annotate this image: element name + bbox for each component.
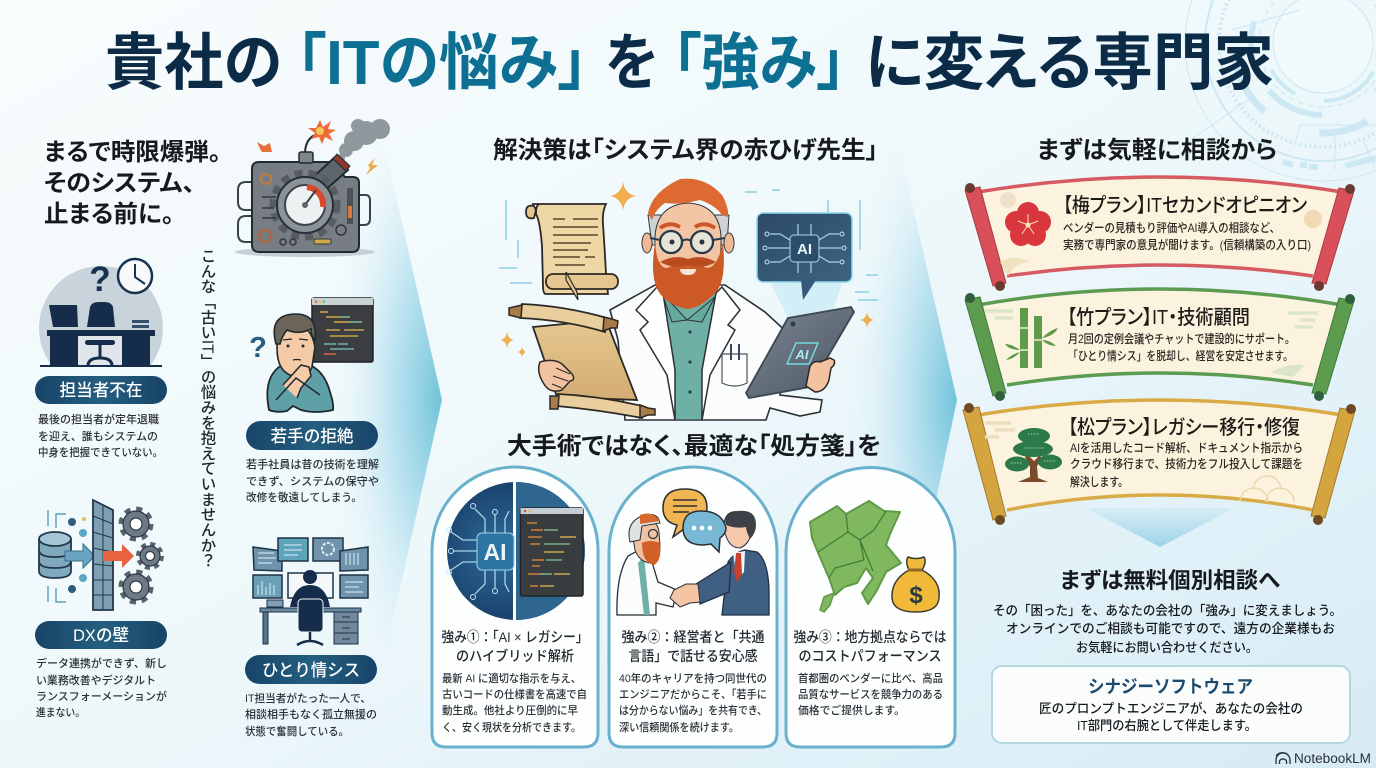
panel: plans and contact bbox=[963, 137, 1371, 766]
plan text: AIを活用したコード解析、ドキュメント指示から bbox=[1070, 440, 1303, 455]
NotebookLM mark: NotebookLM bbox=[1294, 751, 1371, 766]
label pill: DXの壁 bbox=[73, 626, 129, 645]
card text: 古いコードの仕様書を高速で自 bbox=[442, 687, 587, 701]
contact message: その「困った」を、あなたの会社の「強み」に変えましょう。 bbox=[993, 603, 1342, 618]
description: 進まない。 bbox=[36, 706, 85, 719]
card text: 価格でご提供します。 bbox=[798, 703, 905, 717]
title: 「ITの悩み」 bbox=[296, 29, 588, 98]
icon: empty desk bbox=[39, 259, 163, 367]
contact message: オンラインでのご相談も可能ですので、遠方の企業様もお bbox=[1006, 621, 1335, 636]
label pill bbox=[246, 421, 378, 450]
plan text: 【梅プラン】ITセカンドオピニオン bbox=[1063, 194, 1307, 217]
description: データ連携ができず、新し bbox=[36, 656, 167, 670]
plan text: 【松プラン】レガシー移行・修復 bbox=[1068, 416, 1300, 439]
old scroll upper bbox=[526, 204, 618, 300]
label pill bbox=[245, 655, 377, 684]
icon: empty desk: ? bbox=[89, 260, 111, 299]
description: 状態で奮闘している。 bbox=[245, 724, 349, 738]
panel: solution bbox=[432, 137, 955, 747]
title: 「強み」 bbox=[672, 29, 846, 98]
icon: thinking engineer bbox=[249, 298, 373, 412]
plan text bbox=[1063, 194, 1311, 252]
icon: Kanto map and money bag bbox=[810, 501, 939, 612]
description: 改修を敬遠してしまう。 bbox=[246, 490, 362, 504]
description: 相談相手もなく孤立無援の bbox=[245, 707, 377, 721]
icon: AI and legacy code: AI bbox=[484, 539, 506, 565]
card text: 強み①：「AI × レガシー」 bbox=[442, 629, 588, 645]
card text bbox=[442, 629, 588, 734]
card text: 深い信頼関係を続けます。 bbox=[619, 720, 739, 734]
panel: left problems bbox=[35, 119, 390, 738]
plan text: 月2回の定例会議やチャットで建設的にサポート。 bbox=[1068, 331, 1295, 346]
icon: plum blossom bbox=[1005, 202, 1051, 246]
AI speech bubble: AI bbox=[797, 241, 812, 258]
card text: のハイブリッド解析 bbox=[456, 648, 574, 664]
tablet bbox=[746, 307, 854, 398]
card text bbox=[794, 629, 946, 717]
heading: consult: まずは気軽に相談から bbox=[1037, 137, 1277, 164]
card text: 動生成。他社より圧倒的に早 bbox=[442, 703, 578, 717]
description: ランスフォーメーションが bbox=[36, 689, 167, 703]
card text: のコストパフォーマンス bbox=[798, 648, 942, 664]
tablet: AI bbox=[794, 347, 809, 362]
beam from bubble to tablet bbox=[770, 282, 842, 322]
old scroll lower bbox=[509, 304, 655, 418]
description: 最後の担当者が定年退職 bbox=[38, 412, 159, 426]
icon: Kanto map and money bag: $ bbox=[909, 582, 923, 609]
plan text: 実務で専門家の意見が聞けます。(信頼構築の入り口) bbox=[1063, 237, 1311, 252]
label pill: ひとり情シス bbox=[262, 661, 360, 680]
heading: time bomb bbox=[44, 139, 221, 228]
company box: シナジーソフトウェア bbox=[1088, 677, 1253, 697]
doctor head bbox=[642, 179, 734, 309]
card text: 40年のキャリアを持つ同世代の bbox=[619, 671, 767, 685]
plan text: ベンダーの見積もり評価やAI導入の相談など、 bbox=[1063, 220, 1280, 235]
company box bbox=[992, 666, 1350, 743]
item: solo IT admin bbox=[245, 538, 377, 738]
heading: solution: 解決策は「システム界の赤ひげ先生」 bbox=[493, 137, 878, 164]
title: 貴社の bbox=[105, 29, 282, 98]
card text: 品質なサービスを競争力のある bbox=[798, 687, 943, 701]
AI speech bubble bbox=[757, 213, 852, 300]
label pill bbox=[35, 376, 167, 404]
card text: エンジニアだからこそ、「若手に bbox=[619, 687, 767, 701]
description: 若手社員は昔の技術を理解 bbox=[246, 457, 379, 471]
illustration: handshake bbox=[617, 489, 769, 615]
label pill: 若手の拒絶 bbox=[270, 427, 354, 446]
illustration: doctor with scroll and tablet bbox=[499, 179, 878, 420]
title: に変える専門家 bbox=[865, 29, 1274, 98]
heading: time bomb: 止まる前に。 bbox=[44, 201, 174, 228]
label pill bbox=[35, 621, 167, 649]
card text: 言語」で話せる安心感 bbox=[628, 648, 758, 664]
item: DX wall bbox=[35, 500, 167, 719]
card text: 首都圏のベンダーに比べ、高品 bbox=[798, 671, 943, 685]
card: strength 2 bbox=[609, 467, 777, 747]
card: strength 3 bbox=[786, 468, 955, 747]
title bbox=[105, 29, 1274, 98]
label pill: 担当者不在 bbox=[60, 381, 142, 400]
heading: time bomb: まるで時限爆弾。 bbox=[44, 139, 221, 166]
company box: 匠のプロンプトエンジニアが、あなたの会社の bbox=[1039, 701, 1303, 716]
item: young engineer refusal bbox=[246, 298, 379, 504]
subheading: prescription: 大手術ではなく、最適な「処方箋」を bbox=[507, 433, 881, 460]
description bbox=[36, 656, 167, 719]
card text: 強み②：経営者と「共通 bbox=[622, 629, 764, 645]
contact message: お気軽にお問い合わせください。 bbox=[1076, 640, 1258, 655]
description: IT担当者がたった一人で、 bbox=[245, 691, 371, 705]
icon: thinking engineer: ? bbox=[249, 332, 267, 364]
card: strength 1 bbox=[432, 467, 598, 747]
plan text: クラウド移行まで、技術力をフル投入して課題を bbox=[1070, 456, 1303, 471]
plan text: 【竹プラン】IT・技術顧問 bbox=[1067, 306, 1250, 329]
description: い業務改善やデジタルト bbox=[36, 673, 156, 687]
description: を迎え、誰もシステムの bbox=[38, 429, 158, 443]
company box: IT部門の右腕として伴走します。 bbox=[1077, 718, 1257, 733]
vertical question text: こんな「古いIT」の悩みを抱えていませんか？ bbox=[198, 248, 216, 568]
card text: 最新 AI に適切な指示を与え、 bbox=[442, 671, 581, 685]
card text bbox=[619, 629, 767, 734]
plan scroll: matsu bbox=[963, 400, 1356, 525]
description bbox=[246, 457, 379, 504]
item: tantosha fuzai bbox=[35, 259, 167, 459]
plan text: 解決します。 bbox=[1070, 474, 1128, 489]
plan text bbox=[1067, 306, 1295, 363]
plan text: 「ひとり情シス」を脱却し、経営を安定させます。 bbox=[1068, 348, 1293, 363]
heading: free consultation: まずは無料個別相談へ bbox=[1060, 568, 1281, 593]
plan scroll: ume bbox=[965, 177, 1355, 291]
description: 中身を把握できていない。 bbox=[38, 445, 163, 459]
card text: は分からない悩み」を共有でき、 bbox=[619, 703, 767, 717]
heading: time bomb: そのシステム、 bbox=[44, 170, 195, 197]
title: を bbox=[605, 29, 658, 98]
contact message bbox=[993, 603, 1342, 655]
description: できず、システムの保守や bbox=[246, 474, 379, 488]
icon: overheating machine bbox=[235, 119, 390, 257]
arrow: down to contact bbox=[1085, 508, 1235, 547]
icon: bamboo bbox=[1005, 308, 1058, 368]
description bbox=[245, 691, 377, 738]
description bbox=[38, 412, 163, 459]
doctor body bbox=[610, 285, 822, 420]
icon: pine tree bbox=[1005, 428, 1062, 482]
plan scroll: take bbox=[965, 289, 1355, 401]
card text: 強み③：地方拠点ならでは bbox=[794, 629, 946, 645]
icon: operator at monitors bbox=[253, 538, 368, 645]
card text: く、安く現状を分析できます。 bbox=[442, 720, 581, 734]
icon: AI and legacy code bbox=[446, 482, 585, 620]
plan text bbox=[1068, 416, 1303, 489]
icon: DX wall bbox=[39, 500, 162, 610]
